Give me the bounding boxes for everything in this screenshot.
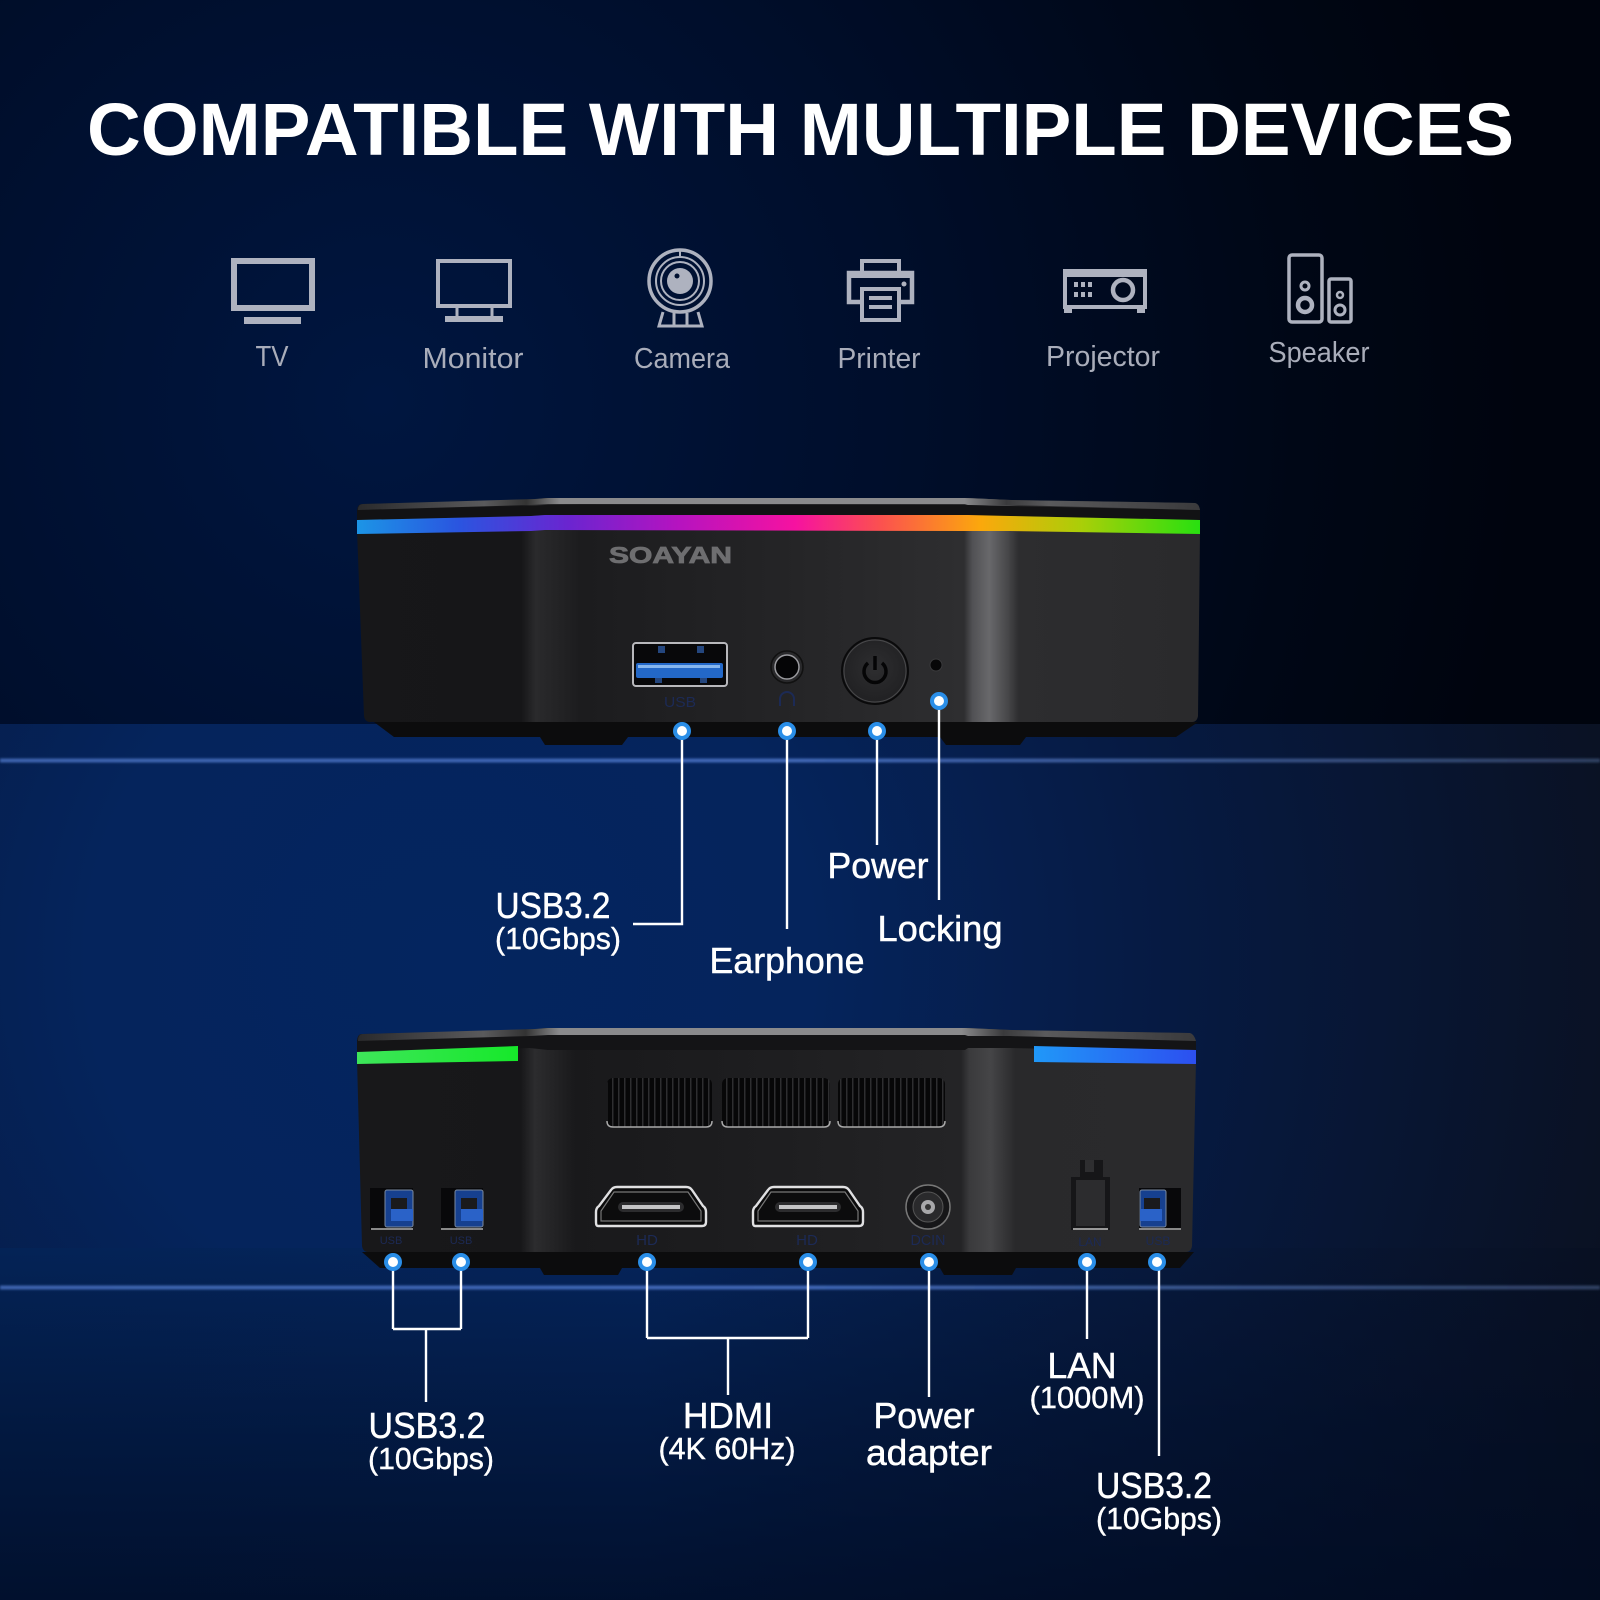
callout: locking [878,694,1002,949]
green light bar [357,1046,518,1064]
callout: front USB: USB3.2 [496,885,610,926]
HDMI ports: HD [636,1232,658,1249]
HDMI ports [596,1187,863,1249]
callout: power adapter: adapter [866,1432,992,1473]
earphone jack [771,651,803,706]
callout: HDMI: (4K 60Hz) [658,1431,796,1466]
USB port right [1139,1188,1181,1248]
callout: locking: Locking [878,908,1002,949]
blue light bar [1034,1046,1196,1064]
title: COMPATIBLE WITH MULTIPLE DEVICES [87,88,1514,171]
power button [842,638,908,704]
USB ports left: USB [450,1235,472,1247]
shadow feet [374,722,1198,745]
callout: power [828,724,929,886]
callout: power: Power [828,845,929,886]
callout: rear USB pair [368,1255,494,1476]
USB ports left: USB [380,1235,402,1247]
callout: LAN: LAN [1048,1345,1116,1386]
callout: rear USB pair: (10Gbps) [368,1441,494,1476]
label: projector: Projector [1046,341,1160,373]
callout: front USB [495,724,689,956]
callout: HDMI [640,1255,815,1466]
rear base [362,1252,1194,1275]
USB port right: USB [1146,1234,1170,1248]
LAN port [1071,1160,1110,1249]
device: rear view [357,1028,1196,1275]
RGB light bar [357,515,1200,534]
callout: rear right USB [1096,1255,1222,1536]
callout: HDMI: HDMI [683,1395,773,1436]
LAN port: LAN [1078,1235,1102,1249]
top rim [358,1028,1196,1041]
device row [234,250,1370,375]
callout: front USB: (10Gbps) [495,921,621,956]
callout: earphone [710,724,864,981]
top rim [358,498,1200,510]
brand logo: SOAYAN [609,542,732,568]
label: camera: Camera [634,343,731,375]
icon: monitor [438,261,510,322]
callout: earphone: Earphone [710,940,864,981]
callout: power adapter: Power [874,1395,975,1436]
HDMI ports: HD [796,1232,818,1249]
dark band above lights [357,1035,1196,1052]
dark band above light [357,505,1200,520]
USB port [633,643,727,711]
callout: rear right USB: USB3.2 [1096,1465,1212,1506]
icon: printer [847,261,914,320]
icon: projector [1063,269,1147,313]
callout: LAN [1030,1255,1144,1415]
icon: TV [234,261,312,324]
callout: power adapter [866,1255,992,1473]
device: front view [357,498,1200,745]
label: TV: TV [256,341,289,373]
icon: camera [649,250,711,326]
rear body [357,1028,1196,1252]
USB port: USB [664,694,696,711]
DC jack: DCIN [910,1232,946,1249]
callout: rear right USB: (10Gbps) [1096,1501,1222,1536]
callout: LAN: (1000M) [1030,1380,1144,1415]
label: speaker: Speaker [1268,337,1370,369]
callout: rear USB pair: USB3.2 [368,1405,486,1446]
USB ports left [370,1188,483,1247]
label: printer: Printer [838,343,921,375]
front body [357,498,1200,722]
icon: speaker [1289,255,1351,322]
label: monitor: Monitor [422,343,524,375]
indicator hole [930,659,942,671]
DC jack [906,1185,950,1249]
vents [607,1078,945,1127]
